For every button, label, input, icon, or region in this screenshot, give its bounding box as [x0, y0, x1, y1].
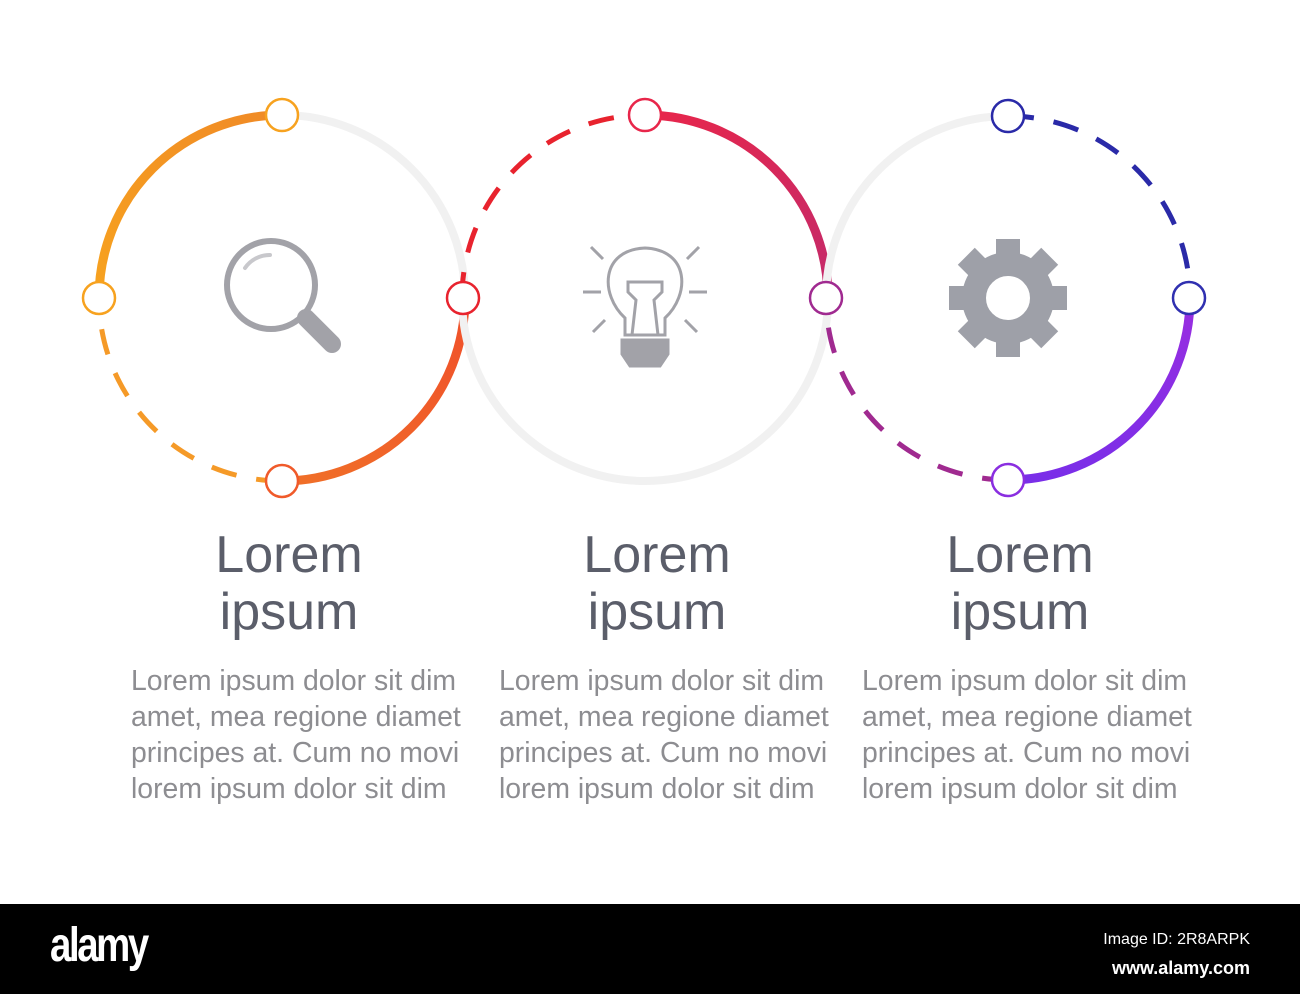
body text 2: Lorem ipsum dolor sit dim — [499, 665, 824, 697]
body text 3: lorem ipsum dolor sit dim — [862, 773, 1178, 805]
icon: light bulb — [583, 247, 707, 366]
title 1: ipsum — [220, 583, 358, 641]
body text 1: Lorem ipsum dolor sit dim — [131, 665, 456, 697]
title 1 — [215, 526, 363, 641]
image id: Image ID: 2R8ARPK — [1103, 931, 1250, 948]
body text 1 — [131, 665, 461, 805]
title 3 — [946, 526, 1094, 641]
body text 3: Lorem ipsum dolor sit dim — [862, 665, 1187, 697]
title 2 — [583, 526, 731, 641]
body text 1: principes at. Cum no movi — [131, 737, 459, 769]
body text 2: amet, mea regione diamet — [499, 701, 829, 733]
title 2: Lorem — [583, 526, 731, 584]
body text 1: amet, mea regione diamet — [131, 701, 461, 733]
body text 2 — [499, 665, 829, 805]
title 3: ipsum — [951, 583, 1089, 641]
body text 2: lorem ipsum dolor sit dim — [499, 773, 815, 805]
icon: gear — [949, 239, 1067, 357]
body text 2: principes at. Cum no movi — [499, 737, 827, 769]
footer bar — [0, 904, 1300, 994]
ring 3 — [810, 100, 1205, 496]
title 2: ipsum — [588, 583, 726, 641]
icon: magnifier — [227, 241, 332, 344]
body text 3: principes at. Cum no movi — [862, 737, 1190, 769]
body text 1: lorem ipsum dolor sit dim — [131, 773, 447, 805]
ring 1 — [83, 99, 465, 497]
title 1: Lorem — [215, 526, 363, 584]
title 3: Lorem — [946, 526, 1094, 584]
image id — [1103, 931, 1250, 978]
ring 2 — [447, 99, 828, 481]
image id: www.alamy.com — [1112, 958, 1250, 978]
body text 3 — [862, 665, 1192, 805]
logo: alamy — [50, 919, 147, 972]
body text 3: amet, mea regione diamet — [862, 701, 1192, 733]
